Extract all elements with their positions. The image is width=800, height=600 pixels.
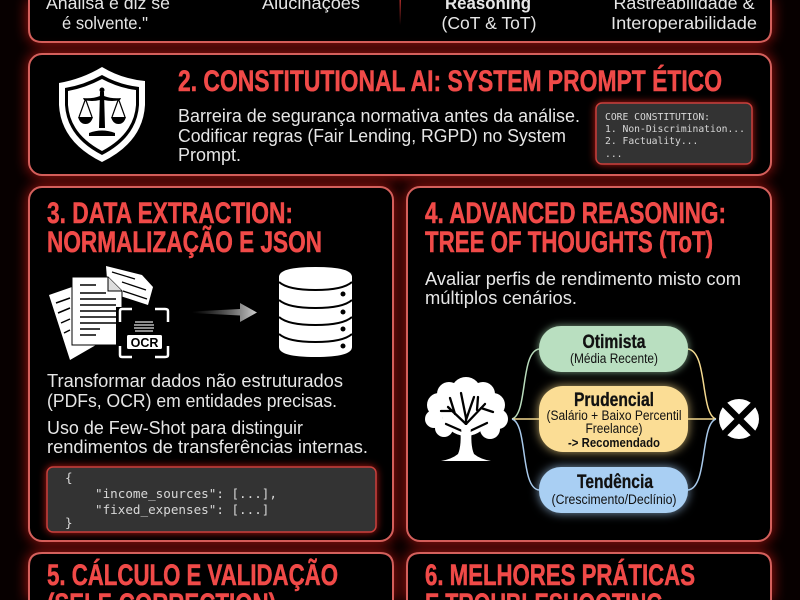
- scenario: Prudencial: -> Recomendado: [568, 436, 660, 450]
- code box: core constitution: 1. Non-Discrimination...: [605, 124, 745, 135]
- code box: JSON: }: [65, 515, 73, 530]
- text: panel 3 body: Uso de Few-Shot para distinguir: [47, 417, 303, 438]
- scenario: Prudencial: Prudencial: [574, 389, 654, 411]
- scenario: Otimista: Otimista: [582, 331, 646, 353]
- heading: panel 3: [47, 197, 322, 259]
- icon: shield with scales: [59, 67, 145, 162]
- text: panel 4 body: Avaliar perfis de rendimento misto com: [425, 268, 741, 289]
- heading: panel 3: 3. DATA EXTRACTION:: [47, 197, 293, 230]
- heading: panel 6: [425, 558, 695, 600]
- heading: panel 5: [47, 558, 338, 600]
- code box: core constitution: ...: [605, 149, 622, 160]
- code box: core constitution: [596, 103, 752, 164]
- code box: core constitution: CORE CONSTITUTION:: [605, 112, 710, 123]
- panel: best practices: [407, 553, 771, 600]
- scenario: Tendência: [539, 467, 688, 513]
- scenario: Otimista: [539, 326, 688, 372]
- panel: data extraction: [29, 187, 393, 541]
- panel: advanced reasoning: [407, 187, 771, 541]
- icon: database: [279, 267, 352, 357]
- text: direct analysis: [46, 0, 170, 29]
- code box: JSON: [47, 467, 376, 532]
- text: panel 3 body: (PDFs, OCR) em entidades precisas.: [47, 390, 337, 411]
- text: direct analysis: é solvente.": [62, 13, 148, 33]
- scenario: Prudencial: (Salário + Baixo Percentil: [546, 408, 682, 423]
- text: panel 4 body: múltiplos cenários.: [425, 287, 577, 308]
- icon: tree: [425, 377, 508, 461]
- icon: documents and OCR: OCR: [131, 336, 158, 350]
- heading: panel 6: 6. MELHORES PRÁTICAS: [425, 558, 695, 592]
- text: traceability: [611, 0, 757, 33]
- text: panel 3 body: Transformar dados não estruturados: [47, 370, 343, 391]
- text: panel 4 body: [425, 268, 741, 308]
- connectors: scenario branches: [512, 349, 716, 490]
- text: panel 2 body: Codificar regras (Fair Lending, RGPD) no System: [178, 125, 566, 146]
- icon: merge node: [719, 399, 759, 439]
- text: traceability: Interoperabilidade: [611, 13, 757, 33]
- text: panel 3 body: rendimentos de transferências internas.: [47, 436, 368, 457]
- scenario: Tendência: Tendência: [577, 471, 653, 493]
- text: panel 2 body: Barreira de segurança normativa antes da análise.: [178, 105, 580, 126]
- icon: documents and OCR: [49, 266, 171, 360]
- panel: constitutional AI: [29, 54, 771, 175]
- heading: panel 5: 5. CÁLCULO E VALIDAÇÃO: [47, 558, 338, 592]
- scenario: Prudencial: Freelance): [586, 421, 642, 436]
- heading: panel 4: TREE OF THOUGHTS (ToT): [425, 226, 713, 259]
- scenario: Tendência: (Crescimento/Declínio): [552, 492, 676, 507]
- heading: panel 4: [425, 197, 726, 259]
- text: reasoning: (CoT & ToT): [442, 13, 536, 33]
- code box: JSON: {: [65, 470, 73, 485]
- code box: JSON: "income_sources": [...],: [95, 486, 277, 501]
- arrow: documents to database: [192, 303, 257, 322]
- scenario: Otimista: (Média Recente): [570, 351, 658, 366]
- heading: panel 3: NORMALIZAÇÃO E JSON: [47, 225, 322, 259]
- text: panel 2 body: Prompt.: [178, 144, 241, 165]
- code box: JSON: "fixed_expenses": [...]: [95, 502, 269, 517]
- text: panel 3 body: [47, 370, 368, 457]
- text: panel 2 body: [178, 105, 580, 165]
- text: reasoning: [442, 0, 536, 33]
- panel: overview: [29, 0, 771, 42]
- panel: calculation and validation: [29, 553, 393, 600]
- scenario: Prudencial: [539, 386, 688, 452]
- code box: core constitution: 2. Factuality...: [605, 136, 698, 147]
